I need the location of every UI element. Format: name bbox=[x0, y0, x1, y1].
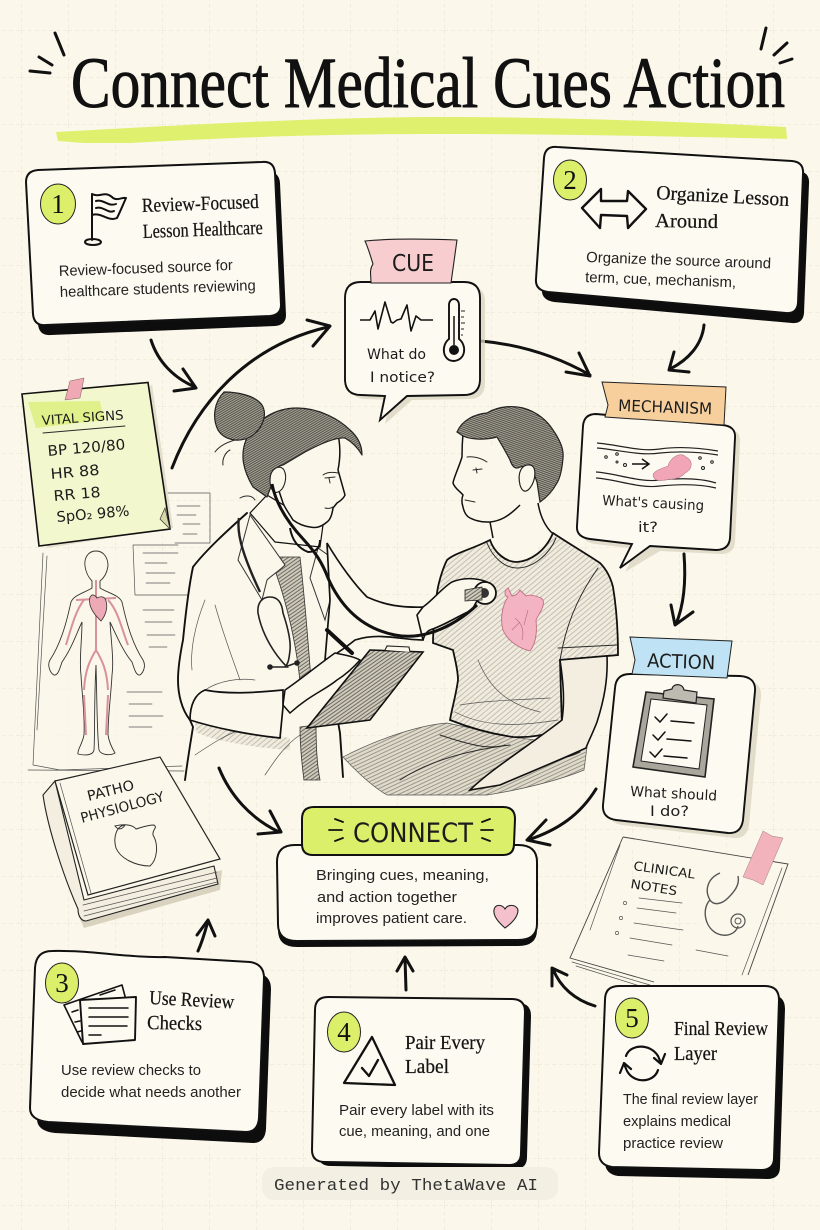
panel: step 3: Use Review bbox=[149, 987, 235, 1013]
panel: step 3 bbox=[30, 951, 271, 1143]
icon: clipboard checklist bbox=[633, 685, 714, 777]
panel: action bubble: I do? bbox=[650, 804, 689, 820]
panel: vital signs sticky note: HR 88 bbox=[50, 463, 100, 483]
panel: step 2: Around bbox=[655, 210, 718, 233]
step number 5: 5 bbox=[625, 1003, 639, 1033]
illustration: clinical notes sheet: NOTES bbox=[630, 876, 678, 898]
illustration: clinical notes sheet bbox=[570, 831, 788, 986]
icon: double arrow bbox=[582, 189, 646, 228]
panel: step 5 bbox=[599, 986, 785, 1179]
title sparks right bbox=[761, 28, 792, 63]
panel: step 2: term, cue, mechanism, bbox=[585, 269, 736, 291]
mechanism tag: MECHANISM bbox=[618, 396, 712, 418]
panel: vital signs sticky note: VITAL SIGNS bbox=[41, 408, 124, 429]
arrow: notes to cue bbox=[172, 320, 330, 468]
doctor hair bbox=[243, 408, 362, 497]
arrow: cue to mechanism bbox=[481, 341, 590, 376]
icon: pink heart bbox=[494, 905, 518, 928]
illustration: pathophysiology book bbox=[43, 757, 222, 928]
illustration: anatomy poster and paper sheets bbox=[28, 493, 210, 771]
panel: step 5: practice review bbox=[623, 1135, 723, 1152]
title sparks left bbox=[30, 33, 64, 73]
arrow: card 3 to book bbox=[197, 920, 215, 951]
step number 2 bbox=[554, 160, 586, 200]
panel: step 3: Checks bbox=[147, 1012, 202, 1035]
panel: step 4 bbox=[312, 997, 531, 1169]
arrow: action to connect bbox=[527, 789, 596, 845]
panel: connect box bbox=[277, 807, 537, 947]
panel: cue bubble: What do bbox=[367, 347, 426, 363]
doctor hair bun bbox=[215, 392, 264, 440]
panel: step 4: Pair Every bbox=[405, 1032, 485, 1054]
panel: step 5: Layer bbox=[674, 1043, 717, 1065]
illustration: patient bbox=[343, 407, 618, 795]
icon: stacked review documents bbox=[64, 985, 136, 1044]
arrow: card 4 to connect bbox=[397, 957, 413, 990]
panel: mechanism bubble: What's causing bbox=[602, 493, 704, 514]
illustration: clinical notes sheet: CLINICAL bbox=[633, 858, 696, 882]
illustration: doctor bbox=[178, 392, 496, 780]
icon: triangle with check bbox=[344, 1037, 395, 1085]
icon: blood vessel with clot bbox=[596, 443, 718, 488]
icon: ECG line bbox=[360, 302, 433, 331]
icon: thermometer bbox=[444, 299, 465, 361]
panel: step 1: Review-Focused bbox=[141, 191, 259, 217]
panel: mechanism bubble bbox=[577, 382, 740, 572]
arrow: card 5 to connect bbox=[552, 968, 595, 1006]
panel: step 3: decide what needs another bbox=[61, 1084, 241, 1101]
panel: step 3: Use review checks to bbox=[61, 1062, 201, 1079]
patient shirt bbox=[433, 533, 618, 737]
panel: step 1: healthcare students reviewing bbox=[60, 277, 256, 301]
panel: step 2: Organize the source around bbox=[586, 249, 771, 272]
panel: step 1 bbox=[26, 162, 286, 335]
panel: step 4: cue, meaning, and one bbox=[339, 1123, 490, 1140]
illustration: pathophysiology book: PATHO bbox=[86, 778, 136, 805]
panel: step 4: Label bbox=[405, 1056, 449, 1078]
panel: connect box: and action together bbox=[317, 889, 457, 906]
panel: step 2 bbox=[536, 147, 809, 323]
action tag bbox=[630, 637, 732, 678]
step number 4 bbox=[328, 1012, 360, 1052]
panel: step 5: Final Review bbox=[674, 1018, 768, 1040]
doctor ear bbox=[270, 467, 286, 492]
clipboard and pen bbox=[307, 630, 423, 728]
panel: action bubble: What should bbox=[630, 784, 718, 805]
title highlighter underline bbox=[56, 117, 787, 143]
cue tag: CUE bbox=[392, 251, 434, 277]
action tag: ACTION bbox=[647, 650, 716, 674]
icon: pink tape bbox=[743, 831, 783, 885]
panel: step 5: The final review layer bbox=[623, 1091, 758, 1108]
doctor reaching arm bbox=[325, 543, 427, 660]
icon: human body with circulatory system bbox=[49, 551, 144, 755]
icon: pink tape bbox=[65, 378, 84, 400]
doctor coat bbox=[178, 513, 343, 780]
panel: vital signs sticky note: RR 18 bbox=[53, 485, 101, 505]
step number 1: 1 bbox=[51, 189, 65, 219]
panel: connect box: Bringing cues, meaning, bbox=[316, 867, 489, 884]
stethoscope loop on shoulder bbox=[238, 518, 300, 670]
stethoscope tubing bbox=[272, 484, 477, 636]
doctor lower hand and sleeve bbox=[283, 653, 360, 713]
panel: step 5: explains medical bbox=[623, 1113, 731, 1130]
doctor hand with chest piece bbox=[417, 579, 487, 640]
step number 3: 3 bbox=[55, 968, 69, 998]
step number 3 bbox=[46, 963, 78, 1003]
doctor inner shirt bbox=[270, 557, 320, 780]
patient neck and face bbox=[453, 433, 552, 565]
icon: stethoscope chest piece bbox=[465, 582, 496, 604]
panel: step 1: Lesson Healthcare bbox=[142, 217, 263, 243]
icon: cycle arrows bbox=[620, 1047, 665, 1080]
arrow: card 1 to illustration bbox=[151, 340, 196, 391]
patient hair bbox=[457, 407, 563, 502]
patient ear bbox=[519, 465, 535, 491]
panel: step 2: Organize Lesson bbox=[656, 182, 790, 211]
panel: vital signs sticky note bbox=[22, 378, 173, 548]
panel: step 4: Pair every label with its bbox=[339, 1102, 494, 1119]
arrow: doctor to connect bbox=[219, 768, 281, 834]
doctor lapels bbox=[238, 515, 335, 620]
step number 5 bbox=[616, 998, 648, 1038]
connect tag: CONNECT bbox=[353, 818, 473, 849]
panel: vital signs sticky note: BP 120/80 bbox=[47, 437, 126, 460]
footer credit bbox=[262, 1167, 558, 1200]
illustration: pathophysiology book: PHYSIOLOGY bbox=[79, 789, 167, 827]
panel: action bubble bbox=[603, 637, 761, 838]
icon: flag bbox=[85, 194, 126, 245]
arrow: card 2 to mechanism bbox=[669, 325, 704, 372]
doctor neck bbox=[250, 495, 323, 547]
doctor sleeve bbox=[190, 690, 283, 738]
cue tag bbox=[365, 239, 457, 283]
connect tag bbox=[302, 807, 515, 855]
step number 2: 2 bbox=[563, 165, 577, 195]
footer credit: Generated by ThetaWave AI bbox=[274, 1177, 538, 1196]
icon: heart on shirt bbox=[502, 588, 543, 651]
panel: step 1: Review-focused source for bbox=[59, 257, 233, 280]
step number 4: 4 bbox=[337, 1017, 351, 1047]
icon: outline heart bbox=[115, 825, 157, 866]
doctor eye and mouth bbox=[323, 472, 338, 508]
icon: small stethoscope bbox=[705, 873, 738, 935]
arrow: mechanism to action bbox=[671, 554, 693, 625]
doctor face bbox=[272, 430, 345, 527]
panel: vital signs sticky note: SpO₂ 98% bbox=[56, 504, 130, 526]
step number 1 bbox=[40, 184, 76, 224]
patient arm bbox=[470, 656, 607, 790]
patient eye and mouth bbox=[465, 457, 487, 502]
patient legs bbox=[343, 723, 587, 795]
panel: mechanism bubble: it? bbox=[638, 520, 658, 536]
mechanism tag bbox=[602, 382, 726, 425]
panel: connect box: improves patient care. bbox=[316, 910, 467, 927]
panel: cue bubble: I notice? bbox=[370, 370, 435, 386]
panel: cue bubble bbox=[345, 239, 485, 424]
